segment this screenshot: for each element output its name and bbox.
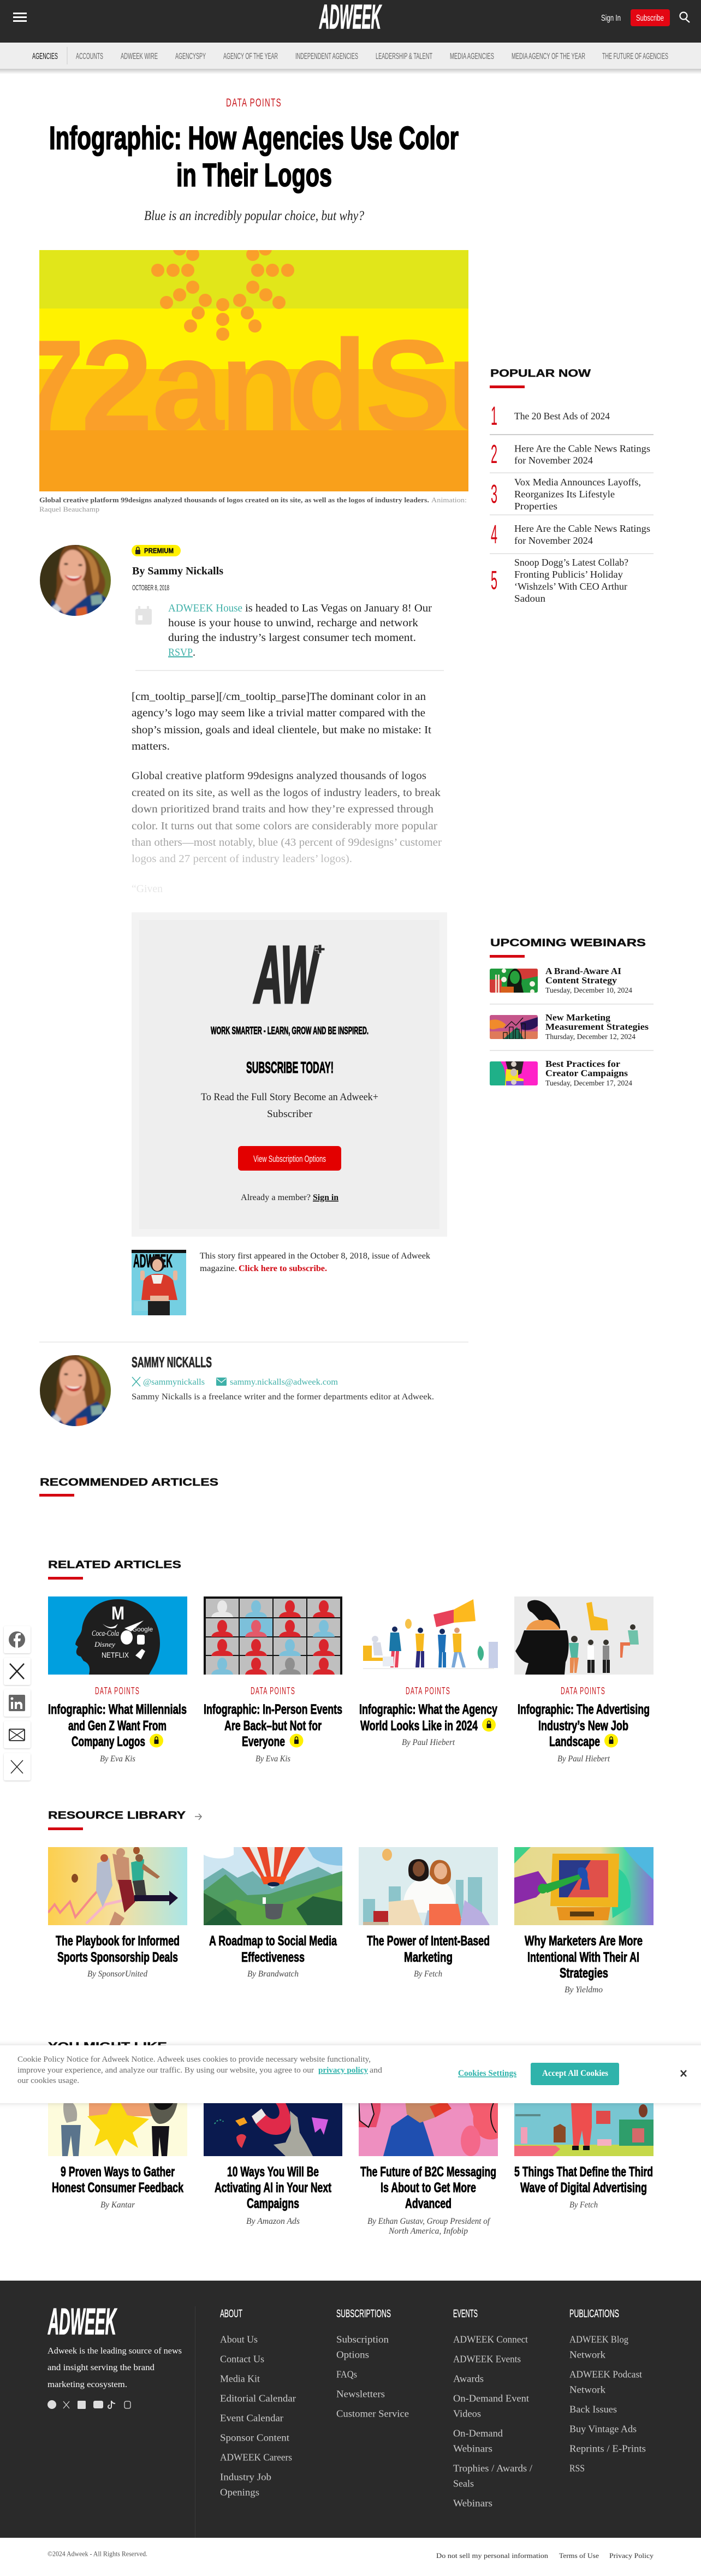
article paragraph 2 fading out: Global creative platform 99designs analyzed thousands of logos	[132, 770, 426, 782]
footer column: publications: ADWEEK Podcast	[569, 2369, 642, 2380]
resource card 1: Sports Sponsorship Deals	[57, 1950, 178, 1965]
you might like card 1	[48, 2078, 187, 2210]
article paragraph 2 fading out: logos and 27 percent of industry leaders’ logos).	[132, 853, 352, 865]
heading: you might like: YOU MIGHT LIKE	[48, 2040, 167, 2052]
image: head full of brand logos: Coca-Cola	[92, 1629, 119, 1638]
tagline: WORK SMARTER - LEARN, GROW AND BE INSPIRED.	[211, 1025, 369, 1037]
sidebar: popular now	[490, 367, 654, 604]
footer column: about: Openings	[220, 2487, 259, 2498]
promo callout: Adweek House: during the industry’s largest consumer tech moment.	[168, 632, 416, 644]
article paragraph 2 fading out: than others—most notably, blue (43 percent of 99designs’ customer	[132, 836, 442, 848]
section navigation bar: LEADERSHIP & TALENT	[376, 52, 432, 61]
image: open head silhouette with people	[514, 1596, 654, 1675]
section navigation bar: MEDIA AGENCY OF THE YEAR	[512, 52, 585, 61]
sign in prompt: Already a member?	[241, 1193, 311, 1202]
footer column: events: On-Demand	[453, 2428, 503, 2439]
popular item 4: Here Are the Cable News Ratings	[514, 523, 650, 534]
hero: 72andSunny letters: 72andSu	[13, 313, 526, 458]
resource card 1	[48, 1847, 187, 1979]
icon: premium lock	[482, 1718, 496, 1732]
article paragraph 1: matters.	[132, 740, 170, 752]
legal links: Privacy Policy	[609, 2551, 654, 2560]
footer column: subscriptions: SUBSCRIPTIONS	[336, 2308, 391, 2320]
hero animation frame	[13, 250, 526, 491]
promo callout: Adweek House: .	[193, 646, 195, 658]
resource card 2: A Roadmap to Social Media	[209, 1933, 337, 1949]
webinar 2: Thursday, December 12, 2024	[545, 1033, 635, 1041]
popular item 3: Reorganizes Its Lifestyle	[514, 489, 615, 500]
resource card 4: Intentional With Their AI	[527, 1950, 639, 1965]
you might like card 3	[359, 2078, 498, 2236]
footer column: events: ADWEEK Events	[453, 2354, 521, 2365]
footer column: subscriptions: Options	[336, 2349, 369, 2360]
share: close	[4, 1753, 31, 1780]
subscribe text: To Read the Full Story Become an Adweek+	[201, 1091, 378, 1103]
button: subscribe	[631, 9, 670, 26]
section navigation bar: AGENCYSPY	[175, 52, 206, 61]
heading: resource library: RESOURCE LIBRARY	[48, 1809, 186, 1821]
image caption: Animation:	[431, 496, 467, 504]
you might like card 2: Campaigns	[247, 2196, 299, 2211]
related card 3	[359, 1596, 498, 1747]
promo callout: Adweek House: ADWEEK House	[168, 602, 242, 614]
image: pet themed room	[514, 2103, 654, 2156]
webinar thumbnail 2	[490, 1015, 538, 1039]
heading: resource library	[48, 1809, 201, 1830]
footer column: events: Webinars	[453, 2443, 492, 2454]
legal links	[436, 2551, 654, 2560]
webinar 3: Best Practices for	[545, 1059, 620, 1069]
image: star between ear and mouth	[48, 2103, 187, 2156]
footer column: publications: Back Issues	[569, 2404, 617, 2415]
footer column: about: Industry Job	[220, 2472, 271, 2483]
author avatar	[37, 542, 114, 619]
footer column: subscriptions: FAQs	[336, 2369, 357, 2380]
footer column: events: Webinars	[453, 2498, 492, 2509]
popular item 2: 2	[491, 440, 497, 469]
button: subscribe: Subscribe	[636, 14, 664, 23]
promo callout: Adweek House: RSVP	[168, 646, 193, 658]
section navigation bar: ADWEEK WIRE	[121, 52, 158, 61]
magazine credit	[200, 1251, 430, 1273]
popular item 5	[491, 557, 628, 604]
section navigation bar	[0, 43, 701, 74]
footer column: about: ADWEEK Careers	[220, 2452, 292, 2463]
popular item 3: 3	[491, 480, 497, 509]
footer social icons	[47, 2400, 130, 2409]
webinar 2	[490, 1012, 649, 1041]
image: head full of brand logos: NETFLIX	[102, 1651, 129, 1659]
footer column: events: Awards	[453, 2373, 484, 2384]
icon: search	[680, 12, 690, 22]
popular item 5: 5	[491, 566, 497, 595]
footer column: about: Editorial Calendar	[220, 2393, 296, 2404]
resource card 4: By Yieldmo	[565, 1985, 603, 1995]
button: view subscription options: View Subscription Options	[253, 1154, 326, 1164]
resource card 3: By Fetch	[414, 1969, 442, 1979]
magazine credit: Click here to subscribe.	[239, 1264, 327, 1273]
category label: DATA POINTS	[226, 97, 282, 109]
footer column: subscriptions: Customer Service	[336, 2408, 409, 2419]
popular item 5: Fronting Publicis’ Holiday	[514, 569, 623, 580]
webinar 3: Tuesday, December 17, 2024	[545, 1079, 632, 1088]
icon: hamburger menu	[13, 13, 27, 22]
section navigation bar: INDEPENDENT AGENCIES	[295, 52, 358, 61]
image caption: Raquel Beauchamp	[39, 505, 99, 513]
resource card 1: The Playbook for Informed	[56, 1933, 180, 1949]
legal links: Do not sell my personal information	[436, 2551, 549, 2560]
popular item 3	[491, 477, 641, 512]
footer column: publications	[569, 2308, 646, 2474]
share sidebar	[4, 1626, 31, 1780]
subtitle: Blue is an incredibly popular choice, but why?	[144, 209, 364, 223]
related card 4: Landscape	[549, 1734, 600, 1749]
footer column: subscriptions	[336, 2308, 409, 2419]
footer column: events: Trophies / Awards /	[453, 2463, 532, 2474]
article paragraph 2 fading out	[132, 770, 442, 865]
article paragraph 1: agency’s logo may seem like a trivial matter compared with the	[132, 707, 425, 719]
icon: premium lock	[150, 1734, 163, 1747]
promo callout: Adweek House	[135, 602, 432, 658]
related card 2	[204, 1596, 342, 1764]
cookie notice text: privacy policy	[318, 2066, 368, 2075]
footer column: about: ABOUT	[220, 2308, 242, 2320]
magazine cover	[132, 1250, 186, 1315]
you might like card 4	[514, 2078, 654, 2210]
related card 3: Infographic: What the Agency	[359, 1702, 497, 1717]
heading: related articles: RELATED ARTICLES	[48, 1559, 181, 1571]
author bio: SAMMY NICKALLS	[132, 1354, 212, 1370]
related card 4: Industry’s New Job	[538, 1718, 628, 1734]
footer description: and insight serving the brand	[47, 2363, 155, 2372]
related card 1: DATA POINTS	[95, 1685, 140, 1696]
sidebar: upcoming webinars: UPCOMING WEBINARS	[490, 937, 646, 949]
author bio	[132, 1354, 434, 1402]
sign in prompt: Sign in	[313, 1193, 338, 1202]
you might like card 1: 9 Proven Ways to Gather	[61, 2164, 175, 2180]
footer column: about: Media Kit	[220, 2373, 260, 2384]
footer column: events: On-Demand Event	[453, 2393, 529, 2404]
footer description: marketing ecosystem.	[47, 2380, 127, 2389]
author bio: sammy.nickalls@adweek.com	[230, 1378, 338, 1387]
footer column: subscriptions: Subscription	[336, 2334, 389, 2345]
image: hot air balloon landscape	[204, 1847, 342, 1925]
promo callout: Adweek House: is headed to Las Vegas on January 8! Our	[245, 602, 432, 614]
image caption	[39, 496, 467, 513]
magazine credit: This story first appeared in the October 8, 2018, issue of Adweek	[200, 1251, 430, 1261]
cookie notice text: and	[370, 2066, 383, 2075]
footer column: events	[453, 2308, 532, 2509]
article paragraph 2 fading out: created on its site, as well as the logos of industry leaders, to break	[132, 787, 441, 799]
footer column: publications: Buy Vintage Ads	[569, 2424, 637, 2435]
sidebar: upcoming webinars	[490, 937, 654, 1088]
webinar 1	[490, 966, 632, 995]
resource card 4: Strategies	[560, 1966, 608, 1981]
cookie notice text: Cookie Policy Notice for Adweek Notice. Adweek uses cookies to provide necessary website functionality,	[17, 2055, 371, 2064]
sidebar: popular now: POPULAR NOW	[490, 367, 591, 379]
related card 1: By Eva Kis	[100, 1754, 135, 1764]
you might like card 3: The Future of B2C Messaging	[360, 2164, 496, 2180]
footer column: events: ADWEEK Connect	[453, 2334, 528, 2345]
popular item 2	[491, 440, 650, 469]
section navigation bar: AGENCIES	[32, 52, 58, 61]
footer column: publications: Network	[569, 2384, 605, 2395]
footer column: about: Event Calendar	[220, 2413, 283, 2424]
image: head full of brand logos: Google	[132, 1625, 153, 1633]
related card 1	[48, 1596, 187, 1764]
footer column: about: Contact Us	[220, 2354, 264, 2365]
resource card 3	[359, 1847, 498, 1979]
link: cookies settings: Cookies Settings	[458, 2069, 516, 2078]
related card 4: By Paul Hiebert	[557, 1754, 610, 1764]
heading: recommended articles: RECOMMENDED ARTICLES	[40, 1476, 218, 1488]
promo callout: Adweek House: house is your house to unwind, recharge and network	[168, 617, 418, 629]
image: retro computer with key	[514, 1847, 654, 1925]
popular item 1: The 20 Best Ads of 2024	[514, 411, 610, 422]
footer	[0, 2281, 701, 2538]
you might like card 2	[204, 2078, 342, 2226]
footer column: events: Videos	[453, 2408, 481, 2419]
webinar 3: Creator Campaigns	[545, 1068, 628, 1078]
cookie notice text: our cookies usage.	[17, 2076, 79, 2085]
related card 1: Infographic: What Millennials	[48, 1702, 187, 1717]
related card 3: DATA POINTS	[406, 1685, 450, 1696]
webinar 1: A Brand-Aware AI	[545, 966, 621, 976]
icon: mail	[216, 1378, 227, 1386]
footer description: Adweek is the leading source of news	[47, 2347, 182, 2355]
icon: calendar	[135, 606, 152, 625]
icon: arrow	[195, 1814, 201, 1820]
hero: dotted sun mark	[151, 242, 294, 341]
you might like card 3: North America, Infobip	[388, 2227, 468, 2236]
footer column: publications: RSS	[569, 2463, 585, 2474]
footer: ADWEEK	[47, 2301, 117, 2342]
webinar 2: Measurement Strategies	[545, 1022, 649, 1032]
popular item 3: Vox Media Announces Layoffs,	[514, 477, 641, 488]
image: team with megaphone	[363, 1599, 498, 1669]
link: sign in: Sign In	[601, 14, 621, 23]
related card 4	[514, 1596, 654, 1764]
image: video call grid	[204, 1596, 342, 1675]
footer column: subscriptions: Newsletters	[336, 2389, 385, 2400]
related card 1: and Gen Z Want From	[68, 1718, 167, 1734]
footer description	[47, 2347, 182, 2389]
title: Infographic: How Agencies Use Color	[49, 120, 459, 156]
article paragraph 2 fading out: color. It turns out that some colors are considerably more popular	[132, 820, 437, 832]
related card 1: Company Logos	[72, 1734, 145, 1749]
sign in prompt	[241, 1193, 338, 1202]
heading: related articles	[48, 1559, 181, 1580]
subscribe text	[201, 1091, 378, 1120]
popular item 1	[491, 402, 610, 431]
popular item 4	[491, 520, 650, 549]
related card 2: Are Back–but Not for	[224, 1718, 322, 1734]
resource card 3: Marketing	[404, 1950, 453, 1965]
date: OCTOBER 8, 2018	[132, 583, 169, 592]
footer column: events: EVENTS	[453, 2308, 478, 2320]
image: head full of brand logos	[48, 1596, 187, 1675]
you might like card 4: Wave of Digital Advertising	[520, 2180, 647, 2195]
footer column: about: Sponsor Content	[220, 2432, 289, 2443]
footer column: about: About Us	[220, 2334, 258, 2345]
cookie notice text	[17, 2055, 383, 2085]
popular item 5: Snoop Dogg’s Latest Collab?	[514, 557, 628, 568]
webinar thumbnail 3	[490, 1061, 538, 1085]
resource card 4	[514, 1847, 654, 1995]
image: magnet and robot hand	[204, 2103, 342, 2156]
popular item 5: ‘Wishzels’ With CEO Arthur	[514, 581, 627, 592]
badge: premium: PREMIUM	[144, 547, 174, 555]
image caption: Global creative platform 99designs analyzed thousands of logos created on its site, as well as the logos of industry leaders.	[39, 496, 429, 504]
share: linkedin	[4, 1689, 31, 1717]
you might like card 1: By Kantar	[100, 2200, 135, 2210]
footer column: about	[220, 2308, 296, 2498]
popular item 2: Here Are the Cable News Ratings	[514, 443, 650, 454]
cookie notice text: improve your experience, and analyze our traffic. By using our website, you agree to our	[17, 2066, 314, 2075]
button: accept all cookies	[531, 2063, 619, 2085]
image: head full of brand logos: M	[111, 1603, 124, 1624]
you might like card 3: By Ethan Gustav, Group President of	[367, 2217, 491, 2226]
related card 3: World Looks Like in 2024	[360, 1718, 478, 1734]
popular item 2: for November 2024	[514, 455, 593, 466]
image: athletes	[48, 1847, 187, 1925]
article paragraph 1	[132, 691, 431, 752]
faded paragraph start: “Given	[132, 883, 163, 895]
cookie banner	[0, 2045, 701, 2103]
you might like card 2: Activating AI in Your Next	[215, 2180, 331, 2195]
resource card 2	[204, 1847, 342, 1979]
icon: premium lock	[604, 1734, 618, 1747]
footer column: publications: Network	[569, 2349, 605, 2360]
related card 4: DATA POINTS	[561, 1685, 605, 1696]
article paragraph 2 fading out: down prioritized brand traits and how they’re expressed through	[132, 803, 433, 815]
author bio: Sammy Nickalls is a freelance writer and the former departments editor at Adweek.	[132, 1392, 434, 1402]
related card 4: Infographic: The Advertising	[518, 1702, 650, 1717]
related card 2: DATA POINTS	[251, 1685, 295, 1696]
popular item 1: 1	[491, 402, 497, 431]
button: view subscription options	[238, 1146, 341, 1171]
resource card 3: The Power of Intent-Based	[367, 1933, 490, 1949]
magazine credit: magazine.	[200, 1264, 237, 1273]
webinar 2: New Marketing	[545, 1012, 611, 1023]
popular item 4: 4	[491, 520, 497, 549]
button: accept all cookies: Accept All Cookies	[542, 2069, 608, 2078]
image: woman speaking to phone	[359, 2103, 498, 2156]
popular item 4: for November 2024	[514, 535, 593, 546]
resource card 1: By SponsorUnited	[87, 1969, 147, 1979]
related card 3: By Paul Hiebert	[402, 1738, 455, 1747]
copyright: ©2024 Adweek - All Rights Reserved.	[47, 2550, 147, 2557]
title	[49, 120, 459, 193]
footer column: publications: Reprints / E-Prints	[569, 2443, 646, 2454]
resource card 4: Why Marketers Are More	[525, 1933, 643, 1949]
share: X	[4, 1658, 31, 1685]
webinar 1: Content Strategy	[545, 975, 617, 986]
webinar thumbnail 1	[490, 969, 538, 993]
logo: AW plus	[253, 930, 325, 1020]
article paragraph 1: [cm_tooltip_parse][/cm_tooltip_parse]The dominant color in an	[132, 691, 426, 703]
webinar 1: Tuesday, December 10, 2024	[545, 987, 632, 995]
heading: subscribe today: SUBSCRIBE TODAY!	[246, 1059, 334, 1077]
article paragraph 1: shop’s mission, goals and ideal clientele, but make no mistake: It	[132, 724, 431, 736]
section navigation bar: ACCOUNTS	[76, 52, 103, 61]
footer column: publications: PUBLICATIONS	[569, 2308, 619, 2320]
you might like card 3: Is About to Get More	[381, 2180, 476, 2195]
related card 2: By Eva Kis	[256, 1754, 290, 1764]
related card 2: Infographic: In-Person Events	[204, 1702, 342, 1717]
popular item 3: Properties	[514, 501, 557, 512]
panel: subscribe paywall	[132, 912, 447, 1237]
subscribe text: Subscriber	[267, 1108, 313, 1120]
you might like card 4: By Fetch	[569, 2200, 598, 2210]
you might like card 2: 10 Ways You Will Be	[227, 2164, 319, 2180]
you might like card 1: Honest Consumer Feedback	[52, 2180, 183, 2195]
share: facebook	[4, 1626, 31, 1653]
resource card 2: Effectiveness	[241, 1950, 305, 1965]
webinar 3	[490, 1059, 632, 1088]
you might like card 3: Advanced	[405, 2196, 452, 2211]
heading: recommended articles	[39, 1476, 218, 1497]
title: in Their Logos	[176, 157, 332, 193]
image: head full of brand logos: Disney	[94, 1640, 115, 1648]
related card 2: Everyone	[242, 1734, 285, 1749]
legal links: Terms of Use	[559, 2551, 599, 2560]
icon: premium lock	[289, 1734, 304, 1747]
icon: close banner	[681, 2070, 686, 2076]
site header	[0, 0, 701, 43]
footer column: events: Seals	[453, 2478, 474, 2489]
author bio: @sammynickalls	[143, 1378, 205, 1387]
logo: AW plus: AW	[253, 930, 321, 1020]
byline: By Sammy Nickalls	[132, 565, 223, 577]
icon: X	[132, 1377, 140, 1386]
you might like card 2: By Amazon Ads	[246, 2217, 300, 2226]
section navigation bar: AGENCY OF THE YEAR	[223, 52, 278, 61]
section navigation bar: MEDIA AGENCIES	[450, 52, 494, 61]
badge: premium	[132, 545, 181, 556]
popular item 5: Sadoun	[514, 593, 545, 604]
share: email	[4, 1721, 31, 1748]
image: shoppers in a city	[359, 1847, 498, 1925]
author bio avatar	[37, 1352, 114, 1429]
resource card 2: By Brandwatch	[247, 1969, 299, 1979]
footer column: publications: ADWEEK Blog	[569, 2334, 628, 2345]
